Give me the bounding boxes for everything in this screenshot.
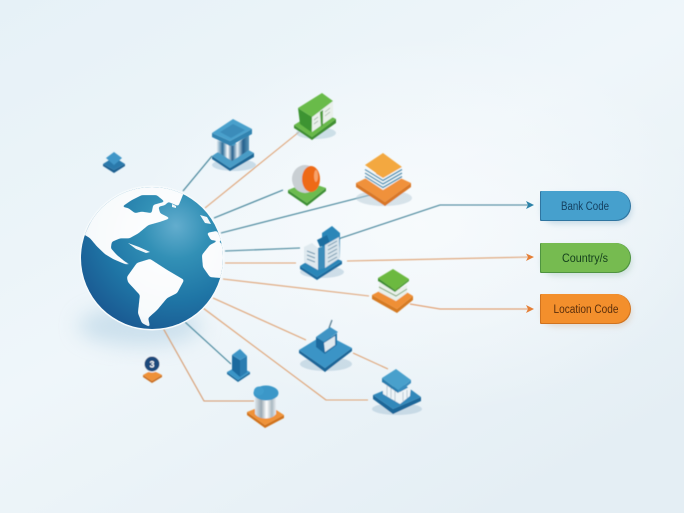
connector lines bbox=[163, 132, 530, 401]
button: Bank Code bbox=[540, 191, 632, 224]
teal line to orange stack bbox=[221, 195, 370, 233]
orange line to green stack bbox=[223, 279, 369, 296]
land masses bbox=[80, 184, 228, 327]
icon: blue tower bbox=[227, 349, 250, 382]
europe bbox=[207, 231, 222, 241]
orange line to building bbox=[225, 262, 296, 264]
currency sign: 3 bbox=[149, 360, 155, 370]
icon: top bank bbox=[212, 119, 256, 171]
icon: dome pillar bbox=[247, 386, 284, 428]
arrowhead: country bbox=[526, 254, 534, 261]
globe shadow bbox=[78, 306, 202, 346]
orange line to country bbox=[347, 257, 530, 261]
icon: orange stack bbox=[356, 153, 412, 206]
label: Location Code bbox=[554, 304, 618, 316]
orange line to lower bank bbox=[203, 308, 368, 400]
icon: coin on orange base bbox=[143, 356, 162, 383]
arrowhead: location code bbox=[526, 305, 534, 313]
label: Bank Code bbox=[561, 201, 609, 213]
icon: orange coin bbox=[288, 165, 326, 206]
icon: lower bank bbox=[372, 369, 422, 415]
continents bbox=[80, 184, 228, 327]
islands bbox=[128, 204, 211, 253]
orange line to green bank bbox=[205, 132, 299, 208]
icon: blue office bbox=[299, 320, 352, 372]
orange line to dome icon bbox=[163, 328, 254, 401]
orange line to location code bbox=[410, 304, 530, 309]
icon: green stack bbox=[372, 269, 413, 313]
teal line to tower bbox=[185, 322, 231, 364]
label: Country/s bbox=[562, 253, 608, 265]
orange line to blue office bbox=[213, 298, 306, 340]
teal line to building bbox=[225, 248, 300, 251]
button: Country/s bbox=[540, 243, 632, 276]
teal line to top bank bbox=[183, 156, 212, 191]
africa bbox=[202, 240, 223, 278]
teal line to bank code bbox=[338, 205, 530, 239]
globe bbox=[80, 184, 228, 330]
arrowhead: bank code bbox=[526, 201, 534, 209]
teal line to coin icon bbox=[214, 190, 283, 218]
icon: small blue block bbox=[103, 152, 125, 173]
button: Location Code bbox=[540, 294, 632, 327]
icon: city building bbox=[300, 226, 344, 280]
icon: green bank bbox=[294, 93, 336, 140]
north america and greenland bbox=[80, 184, 184, 266]
orange line office to lower bank bbox=[353, 353, 388, 369]
south america bbox=[127, 259, 184, 327]
